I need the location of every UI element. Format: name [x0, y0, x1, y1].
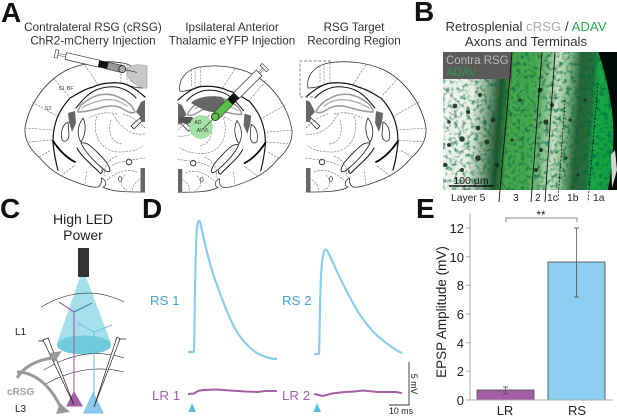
heading: contralateral RSG injection: ChR2-mCherry Injection [30, 34, 156, 48]
injection site [127, 65, 147, 88]
white edge fragment [611, 150, 617, 188]
panel letter C: C [0, 193, 20, 224]
black tissue edge [598, 52, 617, 190]
brain section 3 with dashed target box [300, 61, 426, 192]
panel C: stimulation schematic [0, 193, 126, 415]
nucleus labels: AVVL [197, 128, 209, 134]
heading: ipsilateral thalamic injection: Ipsilateral Anterior [185, 21, 279, 34]
trace labels: RS 1 [150, 293, 180, 308]
scale bar: 100 µm [453, 175, 489, 187]
layer labels: 1c [547, 193, 558, 204]
syringe [54, 50, 138, 76]
heading: target recording region: RSG Target [324, 21, 384, 34]
heading: ipsilateral thalamic injection: Thalamic eYFP Injection [169, 34, 295, 48]
heading: axons and terminals: Axons and Terminals [465, 34, 587, 49]
y tick labels: 6 [457, 307, 464, 322]
axes [466, 213, 613, 400]
layer labels: 1b [567, 193, 579, 204]
error bars [503, 228, 579, 394]
RS traces [188, 221, 402, 359]
heading: target recording region: Recording Region [307, 34, 401, 48]
light cone [57, 277, 111, 343]
purple neuron [59, 302, 92, 406]
heading: high LED power: High LED [53, 211, 113, 227]
panel letter D: D [142, 193, 162, 224]
region labels: S2 [45, 106, 51, 112]
scale bar: 5 mV [409, 374, 419, 394]
dashed target box [300, 61, 331, 97]
layer and input labels: L3 [15, 404, 27, 415]
heading: high LED power: Power [63, 227, 103, 243]
syringe [200, 63, 269, 132]
layer and input labels: L1 [15, 327, 27, 338]
layer labels: 2 [535, 193, 541, 204]
layer arcs [41, 293, 124, 385]
y tick labels: 10 [450, 250, 464, 265]
y tick labels: 4 [457, 336, 464, 351]
layer labels: 1a [593, 193, 605, 204]
fluorescence micrograph [443, 52, 617, 190]
stimulus markers [188, 403, 321, 412]
layer labels: 3 [513, 193, 519, 204]
scale bar [389, 362, 419, 416]
panel B: micrograph [414, 0, 617, 204]
trace labels: LR 1 [152, 388, 180, 403]
panel A: injection schematics [1, 0, 426, 192]
y tick labels: 8 [457, 278, 464, 293]
heading: axons and terminals: Retrosplenial cRSG / ADAV [445, 19, 607, 34]
legend box [443, 52, 512, 79]
panel C: stimulation schematic: cRSG [7, 387, 34, 398]
panel letter E: E [416, 193, 435, 224]
LR traces [188, 390, 402, 396]
ventricle fill [191, 96, 228, 112]
brain section 1 with syringe [25, 50, 147, 192]
scale bar: 10 ms [389, 406, 414, 416]
left pipette [38, 338, 74, 405]
region labels: S1 BF [58, 86, 74, 92]
panel D: voltage traces [142, 193, 419, 416]
bars [477, 262, 605, 400]
layer boundary lines [499, 52, 598, 202]
LED [78, 248, 89, 277]
right pipette [94, 337, 126, 407]
micrograph legend labels: Contra RSG [446, 55, 509, 67]
significance bracket: ** [537, 210, 546, 222]
micrograph legend labels: ADAV [446, 67, 477, 79]
cRSG axon arrows [17, 351, 70, 414]
heading: contralateral RSG injection: Contralateral RSG (cRSG) [24, 21, 162, 34]
y tick labels: 12 [450, 221, 464, 236]
nucleus labels: AD [195, 120, 201, 126]
panel E: bar chart [416, 193, 613, 416]
y tick labels: 2 [457, 364, 464, 379]
trace labels: LR 2 [282, 388, 310, 403]
layer labels: Layer 5 [451, 193, 486, 204]
significance bracket [506, 210, 577, 222]
green thalamic injection spot [190, 116, 212, 138]
blue neuron [78, 323, 112, 413]
y tick labels: 0 [457, 393, 464, 408]
y axis title: EPSP Amplitude (mV) [434, 246, 449, 378]
brain section 2 with syringe [178, 63, 292, 192]
trace labels: RS 2 [282, 293, 312, 308]
